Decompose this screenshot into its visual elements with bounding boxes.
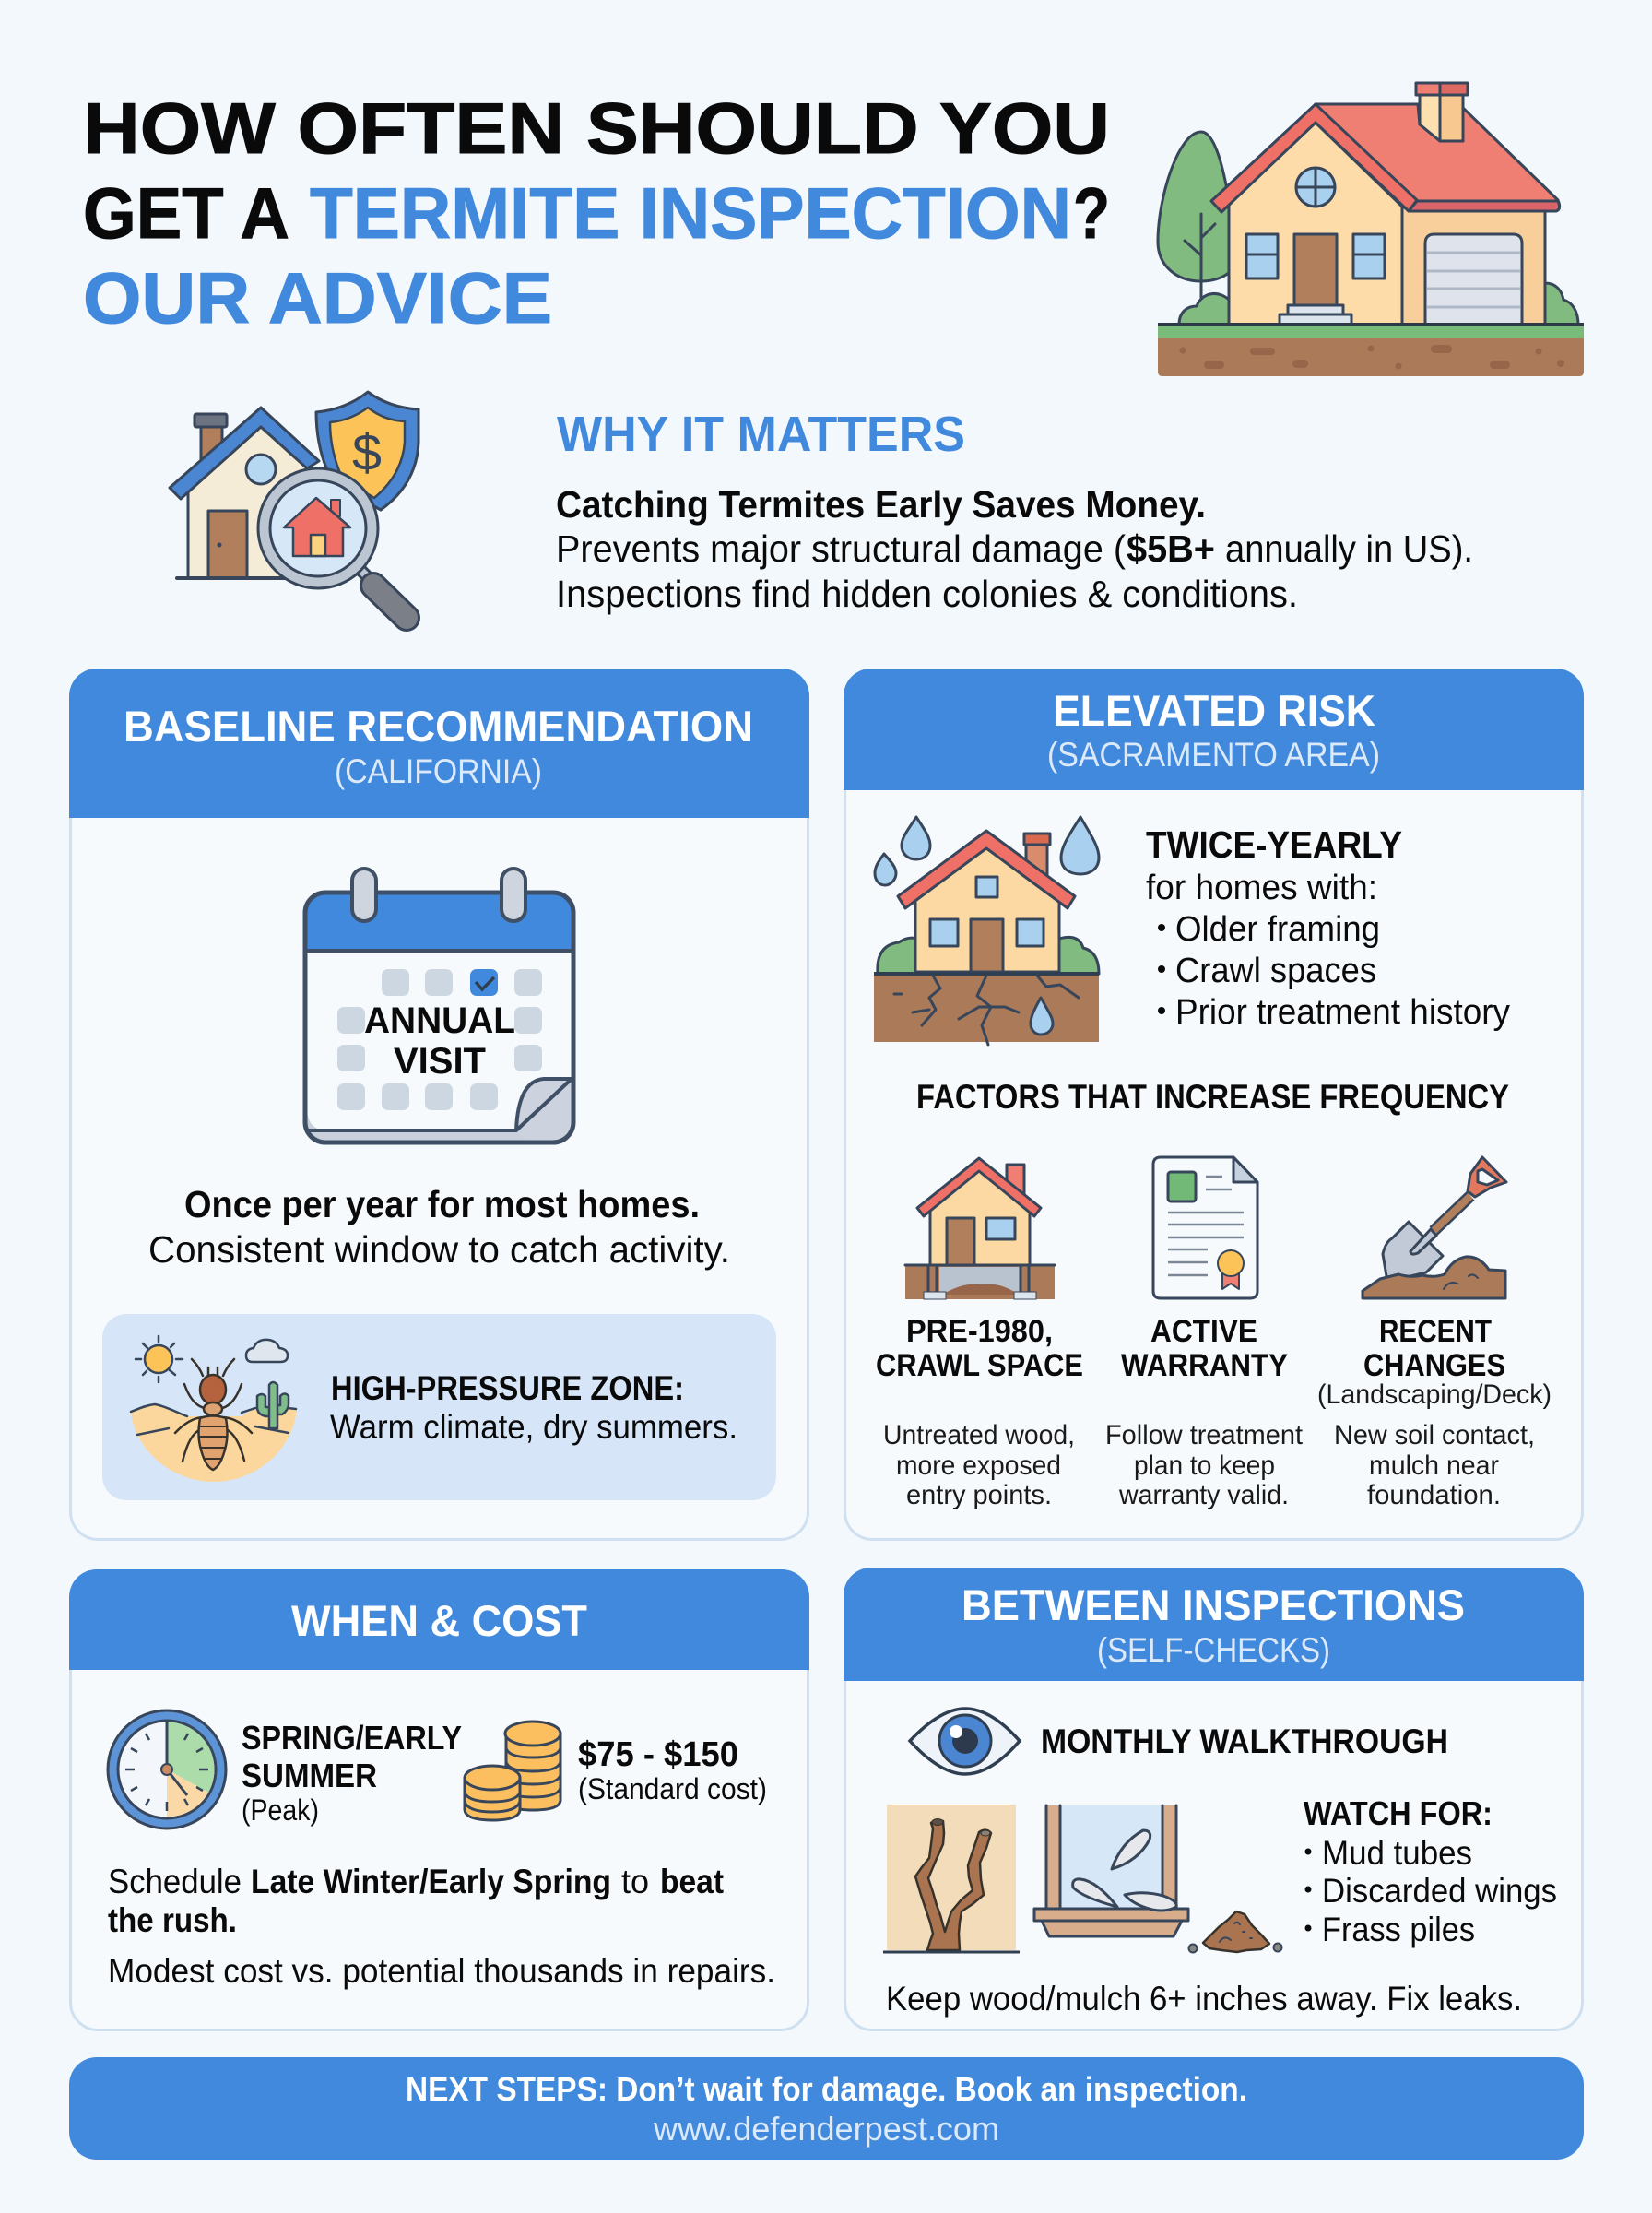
panel header: elevated risk: ELEVATED RISK [1053,686,1375,735]
title: GET A [83,172,289,254]
panel header: when and cost [69,1569,809,1670]
icon: calendar [305,869,573,1142]
heading: monthly walkthrough: MONTHLY WALKTHROUGH [1041,1722,1448,1760]
heading: why it matters: WHY IT MATTERS [557,407,965,462]
text: cost [578,1735,767,1805]
text block: why it matters: Inspections find hidden colonies & conditions. [556,573,1298,615]
text: scheduling advice: beat [660,1863,724,1900]
text: scheduling advice: Late Winter/Early Spring [251,1863,611,1900]
factor: active warranty: plan to keep [1134,1450,1275,1481]
text: twice-yearly list: Crawl spaces [1175,952,1376,990]
callout: high-pressure zone: HIGH-PRESSURE ZONE: [331,1369,684,1407]
text block: why it matters: $5B+ [1127,527,1215,570]
factor: active warranty [1105,1157,1304,1510]
text: scheduling advice: Schedule [108,1863,242,1900]
icon: calendar: ANNUAL [364,1000,515,1041]
icon: termite in desert [131,1336,297,1482]
panel header: baseline: (CALIFORNIA) [335,752,542,790]
icon: coin stacks [465,1722,560,1820]
icon: mud tubes on wood [883,1805,1020,1952]
panel header: when and cost: WHEN & COST [291,1596,587,1645]
text: watch for list: Discarded wings [1322,1872,1557,1910]
text: watch for list: Frass piles [1322,1911,1475,1948]
factor: pre-1980 crawl space: PRE-1980, [906,1314,1053,1349]
callout: high-pressure zone [102,1314,776,1500]
text: scheduling advice: Modest cost vs. potential thousands in repairs. [108,1952,775,1990]
factor: recent changes [1317,1157,1552,1510]
icon: house with garage and tree [1158,83,1584,376]
text: scheduling advice: to [621,1863,649,1900]
factor: active warranty: Follow treatment [1105,1420,1304,1450]
callout: high-pressure zone: Warm climate, dry summers. [330,1408,738,1446]
title: OUR ADVICE [83,257,552,338]
icon: warranty document [1153,1157,1257,1298]
text: prevention tip: Keep wood/mulch 6+ inches away. Fix leaks. [886,1980,1522,2018]
text: watch for list: WATCH FOR: [1304,1794,1493,1832]
factor: pre-1980 crawl space [876,1158,1083,1510]
text: peak season: SUMMER [242,1757,377,1794]
factor: pre-1980 crawl space: more exposed [896,1450,1061,1481]
panel: baseline recommendation [69,669,809,1540]
banner: next steps: NEXT STEPS: Don’t wait for damage. Book an inspection. [406,2070,1247,2108]
text: cost: (Standard cost) [578,1772,767,1805]
text block: why it matters: annually in US). [1225,527,1473,570]
factor: recent changes: (Landscaping/Deck) [1317,1379,1552,1410]
title: HOW OFTEN SHOULD YOU [83,88,1110,169]
factor: active warranty: ACTIVE [1150,1314,1257,1349]
heading: factors: FACTORS THAT INCREASE FREQUENCY [916,1078,1509,1116]
banner: next steps [69,2057,1584,2160]
icon: shovel in soil [1363,1157,1506,1298]
factor: recent changes: foundation. [1367,1480,1501,1510]
text block: why it matters: Prevents major structural damage ( [556,527,1126,570]
text: peak season: (Peak) [242,1793,319,1827]
text block: why it matters: Catching Termites Early Saves Money. [556,483,1206,526]
panel header: elevated risk [844,669,1584,790]
text block: why it matters [556,483,1473,615]
title: TERMITE INSPECTION [310,172,1071,254]
icon: calendar: VISIT [394,1041,486,1082]
text: twice-yearly list: TWICE-YEARLY [1146,823,1402,866]
icon: house on cracked wet soil [874,817,1099,1045]
panel header: between inspections: (SELF-CHECKS) [1097,1631,1330,1669]
panel header: baseline: BASELINE RECOMMENDATION [124,702,753,751]
panel: elevated risk [844,669,1584,1540]
text: scheduling advice [108,1863,775,1990]
icon: eye [910,1709,1020,1774]
text: twice-yearly list [1146,823,1510,1032]
factor: recent changes: mulch near [1369,1450,1499,1481]
factor: recent changes: New soil contact, [1334,1420,1535,1450]
panel header: baseline [69,669,809,818]
text: twice-yearly list: Prior treatment history [1175,993,1510,1032]
text: peak season [242,1719,462,1827]
icon: house over crawl space [905,1158,1055,1299]
factor: recent changes: CHANGES [1363,1348,1505,1383]
factor: pre-1980 crawl space: Untreated wood, [883,1420,1075,1450]
text: watch for list: Mud tubes [1322,1834,1472,1872]
factor: active warranty: WARRANTY [1121,1348,1288,1383]
factor: pre-1980 crawl space: CRAWL SPACE [876,1348,1083,1383]
panel header: between inspections [844,1568,1584,1681]
text: twice-yearly list: for homes with: [1146,869,1377,907]
text: once per year [148,1183,730,1271]
banner: next steps: www.defenderpest.com [653,2110,999,2148]
panel: when and cost [69,1569,809,2030]
factor: active warranty: warranty valid. [1118,1480,1289,1510]
text: scheduling advice: the rush. [108,1901,237,1939]
icon: frass pile [1189,1911,1281,1953]
title: ? [1073,172,1110,254]
text: once per year: Consistent window to catch activity. [148,1228,730,1271]
text: peak season: SPRING/EARLY [242,1719,462,1757]
title [83,88,1110,338]
panel header: elevated risk: (SACRAMENTO AREA) [1047,736,1380,774]
icon: house, shield and magnifier [170,392,419,618]
text: cost: $75 - $150 [578,1735,738,1774]
panel header: between inspections: BETWEEN INSPECTIONS [962,1580,1465,1629]
text: once per year: Once per year for most homes. [184,1183,700,1225]
icon: clock [108,1710,226,1828]
icon: house, shield and magnifier: $ [352,423,382,481]
text: twice-yearly list: Older framing [1175,910,1380,949]
icon: discarded wings on window sill [1034,1805,1188,1936]
panel: between inspections [844,1568,1584,2030]
text: watch for list [1304,1794,1557,1948]
factor: pre-1980 crawl space: entry points. [906,1480,1052,1510]
factor: recent changes: RECENT [1379,1314,1492,1349]
